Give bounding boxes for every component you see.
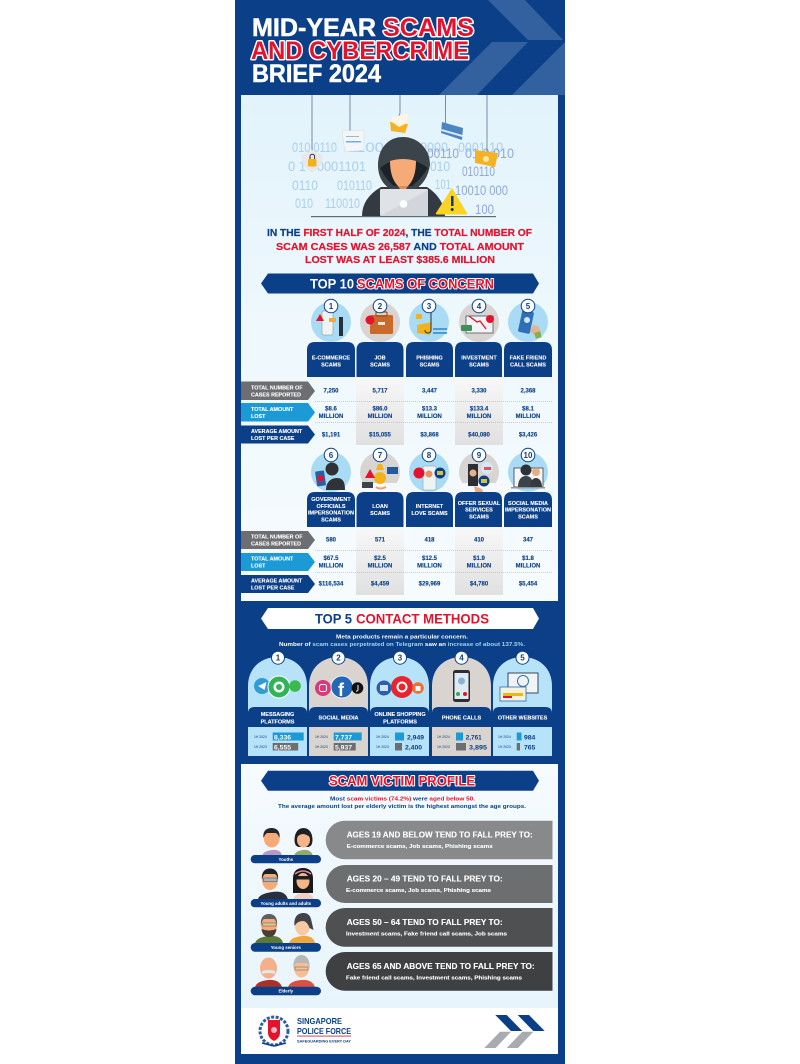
scam numbers	[329, 302, 533, 460]
table values: second table: MILLION	[319, 564, 343, 570]
illustration: binary background: 10010 000	[455, 182, 508, 198]
table values: second table	[319, 538, 540, 588]
card: social media	[309, 657, 368, 756]
row labels: second table: TOTAL NUMBER OF	[251, 534, 303, 540]
illustration: binary background: 0 1 00001101	[288, 158, 366, 174]
table values: second table: 571	[375, 538, 386, 544]
illustration: binary background: 010 0110	[292, 139, 337, 155]
table values: second table: $4,459	[371, 582, 390, 588]
card: messaging platforms: 1H 2024	[254, 735, 267, 739]
row labels: first table: LOST	[251, 414, 266, 420]
heading: top 5 contact methods	[261, 608, 539, 629]
table values: second table: $29,969	[419, 582, 441, 588]
panel: top scams	[241, 95, 558, 601]
heading: top 5 contact methods: TOP 5	[315, 612, 352, 626]
table values: first table: 7,250	[323, 388, 339, 394]
illustration: binary background: 0110	[292, 177, 318, 193]
heading: top 10 scams of concern: SCAMS OF CONCERN	[357, 276, 494, 292]
scam numbers: 8	[427, 451, 432, 460]
title: AND CYBERCRIME	[251, 37, 469, 65]
column header labels: FAKE FRIEND	[510, 356, 546, 362]
row labels: second table: AVERAGE AMOUNT	[251, 578, 303, 584]
profile: ages 19 and below: E-commerce scams, Job scams, Phishing scams	[347, 844, 493, 850]
column header labels: IMPERSONATION	[308, 510, 354, 516]
column header labels: INTERNET	[416, 504, 444, 510]
contact number badges: 5	[520, 654, 525, 663]
table values: first table: $8.6	[325, 406, 337, 412]
scam numbers: 10	[524, 451, 533, 460]
card: phone calls	[432, 657, 491, 756]
profile: ages 50-64: Investment scams, Fake friend call scams, Job scams	[346, 932, 507, 938]
scam numbers: 7	[378, 451, 383, 460]
table values: second table: 418	[424, 538, 435, 544]
table values: first table: $13.3	[422, 406, 438, 412]
card: phone calls: 1H 2023	[437, 745, 450, 749]
profile: ages 20-49: AGES 20 – 49 TEND TO FALL PREY TO:	[347, 874, 503, 884]
icon: e-commerce scams	[311, 302, 351, 342]
column header labels: E-COMMERCE	[312, 356, 350, 362]
desk line	[311, 216, 496, 217]
scam numbers: 5	[526, 302, 531, 311]
title: MID-YEAR	[252, 14, 376, 42]
contact number badges: 3	[398, 654, 403, 663]
table values: first table: $86.0	[372, 406, 388, 412]
column header labels: SCAMS	[370, 362, 390, 368]
scam numbers: 6	[329, 451, 334, 460]
contact methods intro text: Meta products remain a particular concern.	[336, 634, 469, 640]
summary statement	[267, 227, 533, 266]
icon: government officials impersonation	[311, 452, 351, 492]
profile: ages 65 and above: Fake friend call scams, Investment scams, Phishing scams	[346, 976, 522, 982]
illustration: binary background: 010110	[462, 163, 495, 179]
card: online shopping platforms: 2,949	[407, 734, 424, 741]
illustration: binary background	[288, 139, 514, 217]
illustration: binary background: 0000	[420, 139, 448, 155]
contact number badges: 2	[336, 654, 341, 663]
title: SCAMS	[383, 14, 474, 42]
row labels: first table	[241, 382, 315, 444]
row labels: first table: CASES REPORTED	[251, 392, 301, 398]
card: other websites: 765	[524, 744, 536, 751]
header chevrons	[439, 0, 565, 95]
profile: ages 20-49	[326, 865, 552, 903]
table values: second table: $116,534	[319, 582, 344, 588]
column header tabs	[307, 342, 552, 527]
row labels: second table: LOST PER CASE	[251, 586, 295, 592]
profile: ages 50-64	[326, 908, 552, 947]
column header labels: JOB	[374, 356, 386, 362]
card: messaging platforms: PLATFORMS	[261, 720, 295, 726]
table values: second table: $12.5	[422, 556, 438, 562]
column header labels: SERVICES	[465, 508, 493, 514]
column header labels: PHISHING	[416, 356, 443, 362]
row labels: first table: TOTAL NUMBER OF	[251, 386, 303, 392]
column header labels: LOAN	[372, 504, 388, 510]
people: youths: Youths	[279, 857, 294, 862]
card: messaging platforms	[248, 657, 307, 756]
card: phone calls: 1H 2024	[437, 735, 450, 739]
table values: first table: $8.1	[522, 406, 534, 412]
row labels: second table: TOTAL AMOUNT	[251, 556, 294, 562]
table values: first table: $3,426	[519, 432, 538, 438]
table values: second table: $67.5	[323, 556, 339, 562]
profile: ages 65 and above	[326, 952, 552, 991]
table values: second table: MILLION	[368, 564, 392, 570]
card: other websites: OTHER WEBSITES	[498, 716, 548, 722]
panel: scam victim profile	[241, 764, 558, 1008]
card: messaging platforms: 1H 2023	[254, 745, 267, 749]
table values: second table: $5,454	[519, 582, 538, 588]
icon: envelope	[390, 114, 408, 133]
column header labels: SOCIAL MEDIA	[508, 501, 548, 507]
card: online shopping platforms: PLATFORMS	[383, 720, 417, 726]
table values: second table: MILLION	[516, 564, 540, 570]
heading: scam victim profile: SCAM VICTIM PROFILE	[329, 774, 475, 788]
card: other websites: 984	[524, 734, 536, 741]
illustration: binary background: 100	[475, 201, 494, 217]
contact number badges: 1	[276, 654, 281, 663]
icon: warning triangle	[436, 188, 467, 214]
people: young seniors: Young seniors	[271, 945, 301, 950]
column header labels: IMPERSONATION	[505, 508, 551, 514]
number badges and column headers	[307, 299, 552, 527]
card: phone calls: PHONE CALLS	[442, 716, 482, 722]
logo text: Singapore Police Force: SINGAPORE	[297, 1017, 342, 1026]
heading: scam victim profile	[261, 771, 539, 791]
heading: top 10 scams of concern	[261, 274, 539, 294]
scam number badges	[324, 299, 535, 462]
column header labels: OFFER SEXUAL	[458, 501, 501, 507]
scam icons row two	[311, 452, 548, 495]
logo: police crest	[260, 1017, 288, 1046]
table values: first table: MILLION	[516, 414, 540, 420]
summary statement: SCAM CASES WAS 26,587 AND TOTAL AMOUNT	[276, 241, 525, 253]
icon: credit card	[441, 122, 463, 140]
table values: second table: 580	[326, 538, 337, 544]
people: young adults and adults: Young adults and adults	[260, 901, 312, 906]
table values: first table: 5,717	[372, 388, 388, 394]
profile: ages 50-64: AGES 50 – 64 TEND TO FALL PREY TO:	[347, 917, 503, 927]
profile: ages 19 and below	[326, 821, 552, 859]
table values: second table: $1.8	[522, 556, 534, 562]
profile: ages 65 and above: AGES 65 AND ABOVE TEND TO FALL PREY TO:	[347, 961, 535, 971]
illustration: binary background: 01 0 010	[465, 145, 514, 161]
scam numbers: 1	[329, 302, 334, 311]
table values: second table: 347	[523, 538, 534, 544]
contact methods intro text	[279, 634, 526, 648]
column header labels	[308, 356, 551, 524]
illustration: binary background: 010	[430, 158, 450, 174]
card: online shopping platforms: ONLINE SHOPPING	[374, 712, 426, 718]
table values: first table: $15,055	[369, 432, 392, 438]
column header labels: GOVERNMENT	[311, 497, 351, 503]
logo text: Singapore Police Force	[297, 1017, 351, 1043]
table values: first table: MILLION	[319, 414, 343, 420]
card: social media: 1H 2023	[315, 745, 328, 749]
icon: internet love scams	[409, 452, 449, 492]
card: other websites: 1H 2023	[498, 745, 511, 749]
row labels: first table: AVERAGE AMOUNT	[251, 429, 303, 435]
victim profile summary	[278, 796, 527, 810]
victim profile summary: Most scam victims (74.2%) were aged below 50.	[330, 796, 476, 802]
table values: second table: $2.5	[374, 556, 386, 562]
card: messaging platforms: 6,555	[274, 744, 291, 751]
table values: second table: $4,780	[470, 582, 489, 588]
column header labels: SCAMS	[321, 518, 341, 524]
title: BRIEF 2024	[252, 60, 381, 88]
row labels: second table: CASES REPORTED	[251, 542, 301, 548]
card: social media: 1H 2024	[315, 735, 328, 739]
card: online shopping platforms: 1H 2024	[376, 735, 389, 739]
people: elderly: Elderly	[278, 989, 294, 994]
profile: ages 20-49: E-commerce scams, Job scams, Phishing scams	[346, 888, 491, 894]
table values: first table: 3,330	[471, 388, 487, 394]
column header labels: SCAMS	[321, 362, 341, 368]
column header labels: LOVE SCAMS	[411, 511, 448, 517]
logo text: Singapore Police Force: SAFEGUARDING EVERY DAY	[297, 1038, 351, 1043]
card: social media: f	[338, 680, 345, 700]
profile: ages 19 and below: AGES 19 AND BELOW TEND TO FALL PREY TO:	[347, 830, 533, 840]
section: contact methods	[248, 608, 552, 756]
scam numbers: 4	[477, 302, 482, 311]
heading: top 5 contact methods: CONTACT METHODS	[356, 612, 489, 626]
table values: second table: MILLION	[467, 564, 491, 570]
icon: padlock on shield	[301, 150, 323, 173]
card: other websites	[493, 657, 552, 756]
table values: first table: $133.4	[470, 406, 489, 412]
illustration: binary background: 101	[435, 176, 451, 192]
icon: login form	[342, 130, 364, 152]
background: navy page column	[235, 0, 565, 1064]
heading: top 10 scams of concern: TOP 10	[310, 276, 354, 292]
table values: first table: 2,368	[520, 388, 536, 394]
card: online shopping platforms: 2,400	[405, 744, 422, 751]
table values: first table: MILLION	[368, 414, 392, 420]
illustration: binary background: 1100	[348, 139, 384, 155]
card: online shopping platforms: 1H 2023	[376, 745, 389, 749]
card: messaging platforms: 8,336	[274, 734, 291, 741]
highlighted columns	[356, 377, 503, 595]
column header labels: SCAMS	[518, 514, 538, 520]
icon: footer chevrons	[484, 1015, 545, 1048]
people: youths	[251, 828, 321, 863]
scam numbers: 3	[427, 302, 432, 311]
people: young adults and adults	[251, 868, 321, 907]
icon: loan scams	[356, 452, 404, 492]
row labels: first table: LOST PER CASE	[251, 436, 295, 442]
contact number badges	[272, 651, 529, 664]
card: social media: SOCIAL MEDIA	[319, 716, 358, 722]
row labels: first table: TOTAL AMOUNT	[251, 407, 294, 413]
card: other websites: 1H 2024	[498, 735, 511, 739]
table values: second table: $1.9	[473, 556, 485, 562]
icon: social media impersonation	[508, 452, 548, 492]
table values: first table: $40,080	[468, 432, 490, 438]
icon: job scams	[360, 302, 400, 342]
illustration: hacker	[362, 137, 445, 216]
illustration: binary background: 0001 10	[458, 139, 503, 155]
card: online shopping platforms	[370, 657, 429, 756]
icon: fake friend call scams	[508, 302, 548, 342]
illustration: binary background: 00110	[427, 145, 459, 161]
column header labels: SCAMS	[370, 511, 390, 517]
logo rule	[297, 1036, 351, 1037]
card: phone calls: 2,761	[466, 734, 482, 741]
column header labels: INVESTMENT	[461, 356, 497, 362]
scam icons row one	[311, 302, 548, 342]
people: young seniors	[251, 913, 321, 952]
table values: first table	[319, 388, 540, 438]
table values: first table: $3,868	[420, 432, 439, 438]
title	[251, 14, 474, 88]
summary statement: LOST WAS AT LEAST $385.6 MILLION	[305, 254, 495, 266]
illustration: fishing lines	[312, 95, 487, 155]
illustration: binary background: 010110	[337, 177, 372, 193]
logo text: Singapore Police Force: POLICE FORCE	[297, 1027, 351, 1036]
row labels: second table	[241, 531, 315, 593]
card: social media: 5,937	[335, 744, 352, 751]
column header labels: SCAMS	[469, 514, 489, 520]
table values: second table: MILLION	[417, 564, 442, 570]
icon: phishing scams	[409, 302, 449, 342]
table values: first table: MILLION	[417, 414, 442, 420]
illustration: binary background: 010	[295, 195, 313, 211]
column header labels: CALL SCAMS	[510, 362, 546, 368]
card: social media: 7,737	[335, 734, 352, 741]
icon: offer sexual services scams	[455, 452, 503, 495]
row dividers	[315, 402, 552, 572]
summary statement: IN THE FIRST HALF OF 2024, THE TOTAL NUMBER OF	[267, 227, 533, 239]
table values: first table: MILLION	[467, 414, 491, 420]
people: elderly	[251, 955, 321, 995]
contact number badges: 4	[459, 654, 464, 663]
illustration: binary background: 110010	[325, 195, 360, 211]
scam numbers: 2	[378, 302, 383, 311]
icon: investment scams	[459, 302, 499, 342]
table values: first table: $1,191	[322, 432, 341, 438]
card: phone calls: 3,895	[469, 744, 487, 751]
scam numbers: 9	[477, 451, 482, 460]
footer panel	[241, 1008, 558, 1054]
victim profile summary: The average amount lost per elderly victim is the highest amongst the age groups.	[278, 804, 527, 810]
card: messaging platforms: MESSAGING	[261, 712, 294, 718]
icon: skull envelope	[475, 150, 498, 167]
contact methods intro text: Number of scam cases perpetrated on Telegram saw an increase of about 137.5%.	[279, 642, 526, 648]
column header labels: SCAMS	[469, 362, 489, 368]
table values: first table: 3,447	[422, 388, 438, 394]
table values: second table: 410	[474, 538, 485, 544]
row labels: second table: LOST	[251, 564, 266, 570]
column header labels: SCAMS	[420, 362, 440, 368]
column header labels: OFFICIALS	[316, 504, 346, 510]
